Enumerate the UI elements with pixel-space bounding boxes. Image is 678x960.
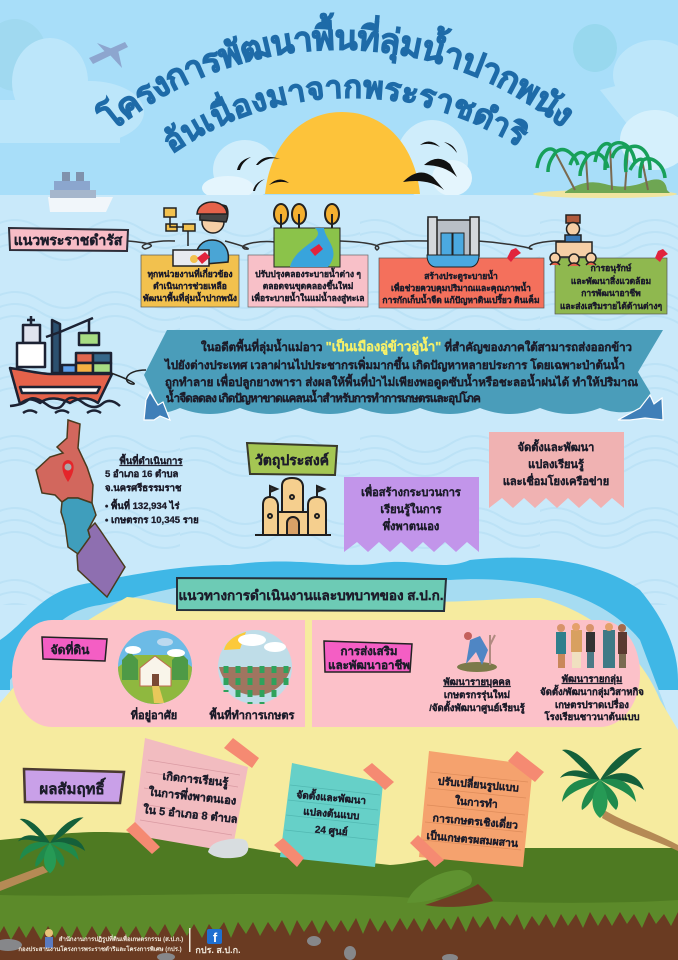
- divider: [189, 928, 190, 952]
- icon: right wave: [618, 395, 663, 420]
- box: water gate: การกักเก็บน้ำจืด แก้ปัญหาดินเปรี้ยว ดินเค็ม: [382, 293, 540, 306]
- note: learning: ใน 5 อำเภอ 8 ตำบล: [143, 802, 239, 826]
- text: farmland: พื้นที่ทำการเกษตร: [210, 707, 295, 722]
- objective: purple: เรียนรู้ในการ: [380, 502, 442, 517]
- section: royal guidance: [9, 202, 668, 314]
- note: learning: เกิดการเรียนรู้: [162, 770, 229, 790]
- background: clouds: [0, 19, 678, 200]
- icon: cruise ship: [48, 172, 113, 212]
- icon: facebook: f: [213, 930, 218, 945]
- icon: map pin: [62, 460, 74, 482]
- icon: cargo ship: [10, 316, 120, 413]
- background: sea: [0, 195, 678, 605]
- note: farming: การเกษตรเชิงเดี่ยว: [432, 809, 519, 832]
- icon: airplane: [89, 42, 128, 68]
- icon: farmer group: [556, 623, 627, 668]
- note: nursery: [274, 763, 394, 867]
- note: learning: ในการพึ่งพาตนเอง: [148, 783, 237, 808]
- box: canals: ปรับปรุงคลองระบายน้ำต่าง ๆ: [255, 267, 361, 280]
- icon: palm island: [533, 143, 677, 198]
- label: royal guidance: [9, 228, 128, 251]
- icon: house: [118, 630, 192, 704]
- panel: land allocation: [12, 620, 305, 727]
- icon: water gate: [427, 217, 479, 267]
- label: land: จัดที่ดิน: [51, 641, 90, 657]
- objective: pink: แปลงเรียนรู้: [528, 458, 584, 472]
- ground: stones: [0, 936, 458, 960]
- box: canals: [248, 255, 368, 307]
- icon: birds: [237, 141, 457, 191]
- note: farming: เป็นเกษตรผสมผสาน: [426, 828, 520, 850]
- text: facebook name: กปร. ส.ป.ก.: [195, 945, 241, 955]
- text: individual: /จัดตั้งพัฒนาศูนย์เรียนรู้: [429, 700, 526, 715]
- label: objectives: [247, 443, 337, 475]
- box: conservation: การอนุรักษ์: [591, 263, 632, 274]
- note: nursery: แปลงต้นแบบ: [303, 806, 360, 822]
- rope: [128, 241, 565, 250]
- box: canals: เพื่อระบายน้ำในแม่น้ำลงสู่ทะเล: [252, 291, 364, 304]
- label: promotion: [324, 641, 412, 672]
- note: farming: ปรับเปลี่ยนรูปแบบ: [437, 772, 520, 796]
- objective: pink: [489, 432, 624, 508]
- icon: farmland: [218, 630, 292, 704]
- title line 2: อันเนื่องมาจากพระราชดำริ: [164, 79, 528, 154]
- icon: farmer: [457, 632, 497, 672]
- box: water gate: เพื่อช่วยควบคุมปริมาณและคุณภาพน้ำ: [391, 281, 531, 294]
- note: nursery: 24 ศูนย์: [314, 824, 348, 839]
- text: group: [540, 674, 644, 723]
- box: conservation: และส่งเสริมรายได้ด้านต่างๆ: [560, 301, 662, 311]
- banner: background paragraph: [144, 330, 663, 414]
- label: results: ผลสัมฤทธิ์: [39, 777, 106, 798]
- icon: left palm: [0, 817, 85, 891]
- box: agencies: ทุกหน่วยงานที่เกี่ยวข้อง: [147, 267, 233, 280]
- text: project area: • พื้นที่ 132,934 ไร่: [105, 498, 180, 512]
- map: project area: [36, 420, 125, 597]
- text: project area: พื้นที่ดำเนินการ: [120, 453, 183, 467]
- text: project area: • เกษตรกร 10,345 ราย: [105, 515, 199, 526]
- background: sky: [0, 0, 678, 196]
- text: project area: จ.นครศรีธรรมราช: [105, 482, 182, 494]
- objective: pink: และเชื่อมโยงเครือข่าย: [503, 473, 609, 488]
- background: shallow water: [10, 578, 670, 720]
- box: conservation: การพัฒนาอาชีพ: [581, 288, 641, 298]
- rope to banner: [111, 370, 146, 384]
- ground: dirt: [0, 908, 678, 960]
- title line 1: โครงการพัฒนาพื้นที่ลุ่มน้ำปากพนัง: [94, 12, 572, 126]
- label: royal guidance: แนวพระราชดำรัส: [14, 232, 123, 248]
- icon: sun: [265, 112, 420, 194]
- text: housing: ที่อยู่อาศัย: [131, 707, 177, 723]
- objective: purple: เพื่อสร้างกระบวนการ: [361, 484, 461, 499]
- note: farming: [410, 751, 544, 867]
- background: beach water: [0, 558, 678, 690]
- text: project area: [105, 453, 199, 526]
- icon: sand castle: [255, 478, 331, 535]
- note: learning: [126, 738, 259, 854]
- box: water gate: สร้างประตูระบายน้ำ: [424, 269, 498, 282]
- icon: river and trees: [274, 204, 340, 267]
- label: land: [42, 637, 107, 661]
- footer: logos and credits: [18, 928, 241, 955]
- box: conservation: [555, 249, 668, 314]
- label: promotion: การส่งเสริม: [341, 645, 397, 658]
- banner: background paragraph: น้ำจืดลดลง เกิดปัญหาขาดแคลนน้ำสำหรับการทำการเกษตรและอุปโภค: [166, 389, 481, 406]
- text: group: โรงเรียนชาวนาต้นแบบ: [543, 711, 640, 723]
- text: individual: [429, 677, 526, 715]
- ground: grass: [0, 832, 678, 960]
- text: agency name: [18, 934, 183, 953]
- icon: left wave: [144, 392, 170, 420]
- icon: worker: [164, 202, 228, 266]
- banner: background paragraph: ในอดีตพื้นที่ลุ่มน้ำแม่อาว "เป็นเมืองอู่ข้าวอู่น้ำ" ที่สำคัญของภาคใต้สามารถส่งออกข้าว: [201, 336, 632, 355]
- icon: right palm: [560, 748, 678, 851]
- box: conservation: และพัฒนาสิ่งแวดล้อม: [571, 274, 651, 286]
- label: results: [24, 769, 124, 803]
- text: agency name: สำนักงานการปฏิรูปที่ดินเพื่อเกษตรกรรม (ส.ป.ก.): [59, 934, 183, 944]
- box: canals: ตลอดจนขุดคลองขึ้นใหม่: [263, 279, 353, 292]
- text: individual: เกษตรกรรุ่นใหม่: [444, 689, 510, 701]
- label: promotion: และพัฒนาอาชีพ: [328, 659, 410, 672]
- text: individual: พัฒนารายบุคคล: [443, 677, 511, 688]
- background: sand: [0, 597, 678, 960]
- title: [94, 12, 572, 154]
- text: group: จัดตั้ง/พัฒนากลุ่มวิสาหกิจ: [540, 684, 644, 698]
- text: project area: 5 อำเภอ 16 ตำบล: [105, 469, 179, 480]
- ground: lower grass: [0, 894, 678, 940]
- heading: approach: แนวทางการดำเนินงานและบทบาทของ ส.ป.ก.: [178, 588, 444, 603]
- text: group: เกษตรปราดเปรื่อง: [555, 697, 629, 711]
- text: group: พัฒนารายกลุ่ม: [562, 674, 622, 685]
- text: agency name: กองประสานงานโครงการพระราชดำริและโครงการพิเศษ (กปร.): [18, 945, 182, 953]
- note: farming: ในการทำ: [454, 793, 498, 811]
- heading: approach: [177, 578, 446, 611]
- panel: career promotion: [312, 620, 644, 727]
- objective: purple: พึ่งพาตนเอง: [383, 518, 439, 533]
- ground: mound: [407, 870, 493, 907]
- icon: facebook: [207, 929, 222, 945]
- box: agencies: [141, 255, 239, 307]
- box: agencies: ดำเนินการช่วยเหลือ: [153, 281, 227, 291]
- note: nursery: จัดตั้งและพัฒนา: [296, 787, 367, 807]
- banner: background paragraph: ไปยังต่างประเทศ เวลาผ่านไปประชากรเพิ่มมากขึ้น เกิดปัญหาหลายประการ โดยเฉพาะป่าต้นน้ำ: [163, 356, 625, 372]
- objective: pink: จัดตั้งและพัฒนา: [518, 439, 594, 454]
- label: objectives: วัตถุประสงค์: [255, 452, 329, 469]
- icon: mascot: [45, 929, 53, 948]
- objective: purple: [344, 477, 479, 552]
- icon: rock: [208, 839, 248, 858]
- banner: background paragraph: ถูกทำลาย เพื่อปลูกยางพารา ส่งผลให้พื้นที่ป่าไม่เพียงพอดูดซับน้ำหรือชะลอน้ำฝนได้ ทำให้ปริมาณ: [165, 373, 638, 390]
- box: water gate: [379, 248, 544, 308]
- box: agencies: พัฒนาพื้นที่ลุ่มน้ำปากพนัง: [143, 291, 237, 304]
- icon: community: [550, 215, 596, 266]
